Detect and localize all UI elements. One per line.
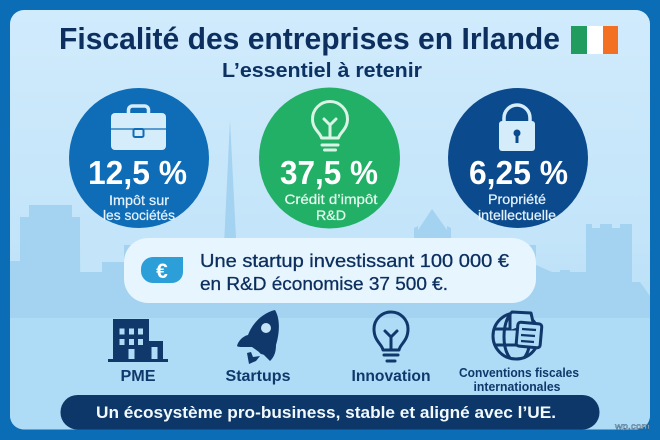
title: Fiscalité des entreprises en Irlande xyxy=(59,22,560,56)
icon: euro badge xyxy=(141,257,183,283)
icon: Irish flag xyxy=(571,26,618,54)
label: Crédit d’impôt xyxy=(284,191,378,207)
label: PME xyxy=(120,368,156,385)
icon: euro badge: € xyxy=(156,260,168,283)
item: Startups xyxy=(226,310,290,385)
panel: crédit d'impôt R&D xyxy=(259,88,400,228)
skyline of Dublin xyxy=(10,120,650,318)
item: Conventions fiscales internationales xyxy=(459,312,579,394)
callout text: Une startup investissant 100 000 € xyxy=(200,250,510,271)
value: 6,25 % xyxy=(469,154,568,191)
icon: building xyxy=(108,319,168,362)
subtitle: L’essentiel à retenir xyxy=(222,59,422,82)
callout: startup example: en R&D économise 37 500 €. xyxy=(200,273,448,294)
icon: rocket xyxy=(237,310,279,364)
label: Impôt sur xyxy=(109,192,169,208)
label: Startups xyxy=(226,368,290,385)
item: PME xyxy=(108,319,168,385)
item: Innovation xyxy=(352,312,430,385)
panel: propriété intellectuelle xyxy=(448,88,588,228)
footer banner xyxy=(60,395,600,430)
label: Innovation xyxy=(352,368,430,385)
panel: impôt sur les sociétés xyxy=(69,88,209,228)
watermark: wp.com xyxy=(614,421,650,431)
icon: globe with document xyxy=(493,312,542,359)
lower water band xyxy=(10,318,650,430)
panel: propriété intellectuelle: intellectuelle xyxy=(478,207,556,223)
panel: crédit d'impôt R&D: R&D xyxy=(316,207,346,223)
value: 37,5 % xyxy=(280,154,378,191)
value: 12,5 % xyxy=(88,154,187,191)
panel: impôt sur les sociétés: les sociétés xyxy=(103,207,175,223)
icon: briefcase xyxy=(111,106,166,150)
icon: light bulb xyxy=(312,102,348,150)
icon: padlock xyxy=(499,105,535,151)
footer banner: Un écosystème pro-business, stable et aligné avec l’UE. xyxy=(96,403,556,422)
icon: light bulb xyxy=(374,312,408,361)
item: Conventions fiscales internationales: internationales xyxy=(474,380,561,394)
callout: startup example xyxy=(124,238,536,303)
label: Propriété xyxy=(488,191,546,207)
label: Conventions fiscales xyxy=(459,366,579,380)
